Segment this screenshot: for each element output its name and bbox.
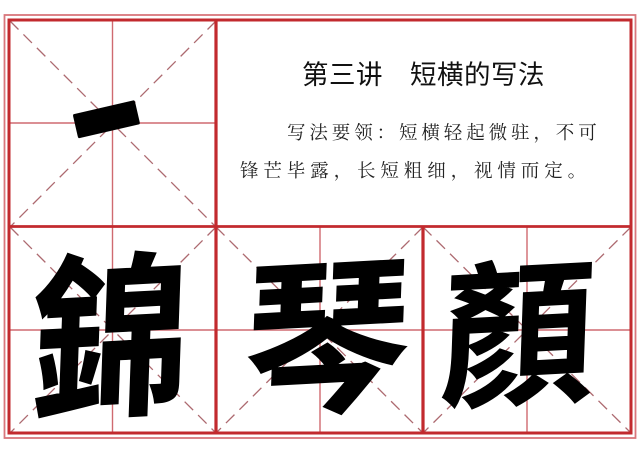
calligraphy character: jin: 錦 bbox=[27, 194, 192, 452]
title bbox=[302, 60, 545, 90]
calligraphy character: qin: 琴 bbox=[241, 201, 415, 451]
calligraphy character: yan: 顏 bbox=[438, 209, 598, 442]
title: 短横的写法 bbox=[410, 60, 545, 90]
instruction text: 写法要领：短横轻起微驻，不可 bbox=[287, 119, 601, 145]
instruction text bbox=[240, 119, 601, 183]
brush stroke character: yi: 一 bbox=[53, 18, 157, 209]
instruction text: 锋芒毕露，长短粗细，视情而定。 bbox=[240, 157, 591, 183]
title: 第三讲 bbox=[302, 60, 383, 90]
